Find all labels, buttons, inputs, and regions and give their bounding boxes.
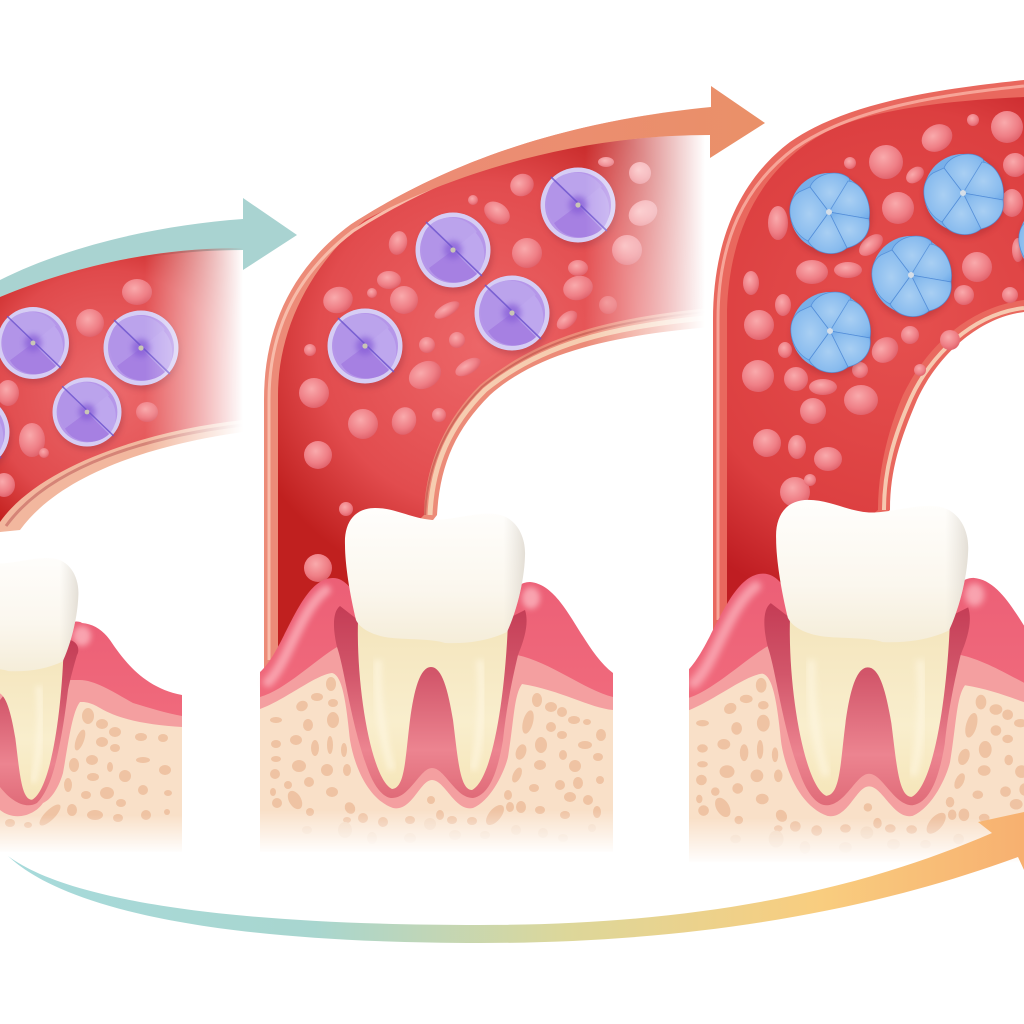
blood vessel — [713, 80, 1024, 650]
bone and gum, middle — [258, 578, 615, 854]
panel: right stage (partly cropped) — [660, 80, 1024, 870]
tooth, left — [0, 553, 78, 800]
panel: left stage (partly cropped) — [0, 198, 297, 854]
panel: middle stage — [258, 86, 765, 854]
arrow: orange curved arrow — [350, 86, 765, 225]
blood vessel with fade — [0, 248, 243, 532]
tooth, middle — [345, 508, 525, 790]
left edge mask, right panel — [660, 640, 689, 870]
blood vessel with fade — [264, 107, 710, 690]
tooth, right — [776, 500, 968, 797]
bone and gum, right — [683, 574, 1024, 864]
bone and gum, left — [0, 622, 184, 854]
arrow: teal curved arrow — [0, 198, 297, 300]
arrow: bottom sweep arrow — [8, 812, 1024, 943]
